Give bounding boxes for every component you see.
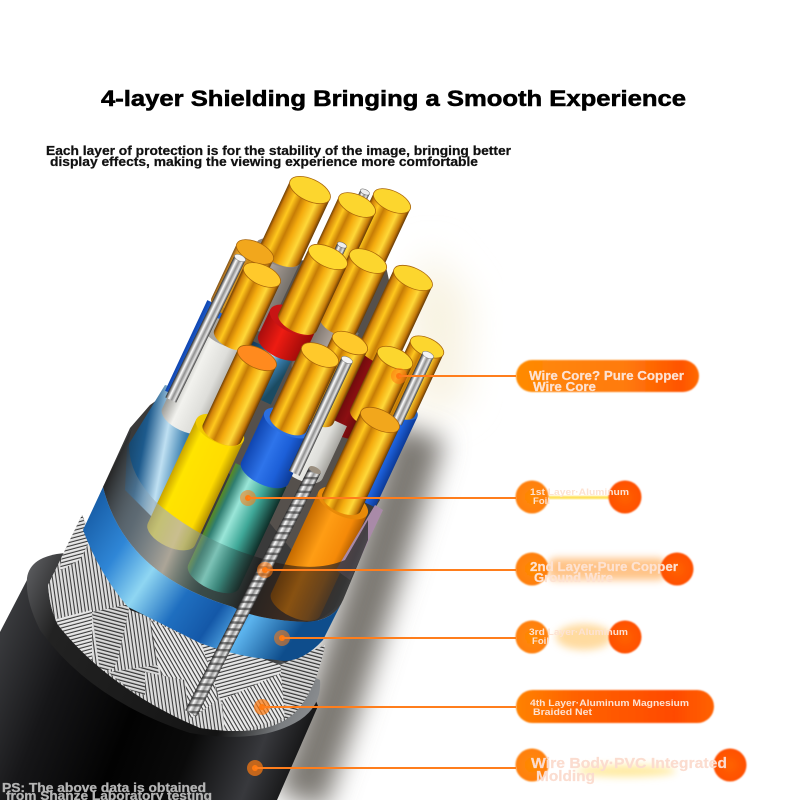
soft glow behind wires xyxy=(405,250,470,420)
insulated wire: red xyxy=(253,298,321,367)
label: wire body xyxy=(516,748,746,785)
insulated wire: white xyxy=(157,312,253,441)
subtitle text: display effects, making the viewing experience more comfortable xyxy=(50,155,478,169)
gold conductor: right middle xyxy=(295,326,371,432)
label: 1st layer: 1st Layer·Aluminum xyxy=(530,487,629,498)
insulated wire: blue right xyxy=(346,396,421,507)
label: 1st layer: Foil xyxy=(533,496,550,507)
translucent sheath layer xyxy=(103,428,368,625)
gold conductor: back middle xyxy=(314,187,379,268)
black PVC jacket xyxy=(0,553,320,800)
label: wire body: Wire Body·PVC Integrated xyxy=(531,756,727,772)
gold conductor: far right xyxy=(378,331,447,424)
label: wire body: Molding xyxy=(536,769,595,785)
label: 2nd layer: Ground Wire xyxy=(534,570,613,585)
gold conductor: front middle xyxy=(266,337,342,440)
leader: wire body xyxy=(247,760,516,776)
lavender wire edge xyxy=(336,505,383,580)
label: wire core: Wire Core xyxy=(533,379,596,394)
subtitle text xyxy=(46,144,511,169)
insulated wire: grey, back xyxy=(222,232,305,337)
gold conductor: left back xyxy=(207,234,277,324)
label: 3rd layer xyxy=(516,620,642,654)
title: 4-layer Shielding Bringing a Smooth Experience xyxy=(101,86,686,111)
label: 3rd layer: Foil xyxy=(532,636,549,647)
leader: 1st layer xyxy=(240,490,516,506)
3rd layer aluminum foil band xyxy=(83,487,343,661)
leader: 3rd layer xyxy=(274,630,516,646)
rear insulation mass xyxy=(210,260,400,560)
core base xyxy=(103,380,380,622)
gold conductor: front left xyxy=(199,340,280,451)
gold conductor: right near xyxy=(346,341,416,434)
label: 4th layer: 4th Layer·Aluminum Magnesium xyxy=(530,698,689,709)
label: 1st layer xyxy=(516,480,642,514)
gold conductor: centre xyxy=(274,239,351,340)
insulated wire: blue left xyxy=(165,300,233,403)
insulated wire: teal xyxy=(183,463,286,600)
insulated wire: white, front-centre xyxy=(278,408,347,489)
leader: 2nd layer xyxy=(257,562,516,578)
leader: wire core xyxy=(391,368,516,384)
insulated wire: yellow xyxy=(142,407,249,557)
label: 2nd layer xyxy=(516,552,694,586)
label: 4th layer xyxy=(516,690,714,723)
gold conductor: right upper xyxy=(355,260,436,370)
insulated wire: orange xyxy=(266,480,373,628)
gold conductor: left front xyxy=(210,257,284,356)
upper blue foil tube xyxy=(125,385,215,530)
leader: 4th layer xyxy=(254,699,516,715)
footnote xyxy=(2,781,212,800)
cable cast shadow xyxy=(300,432,420,800)
silver strand: centre xyxy=(289,355,354,476)
label: wire core xyxy=(516,360,699,394)
label: wire core: Wire Core? Pure Copper xyxy=(529,368,684,383)
silver strand tip: middle xyxy=(326,241,348,272)
silver strand tip: back xyxy=(351,188,371,214)
insulated wire: dark red xyxy=(316,342,399,446)
insulated wire: grey, centre xyxy=(287,313,359,394)
label: 4th layer: Braided Net xyxy=(533,707,593,718)
silver strand: far right xyxy=(391,350,435,426)
subtitle text: Each layer of protection is for the stability of the image, bringing better xyxy=(46,144,511,158)
gold conductor: front right xyxy=(318,402,403,520)
insulated wire: blue-metal below red xyxy=(231,341,292,405)
silver ground wire xyxy=(185,464,322,716)
footnote: PS: The above data is obtained xyxy=(2,781,206,795)
gold conductor: back left xyxy=(256,171,335,273)
silver strand: left xyxy=(165,253,247,403)
label: 2nd layer: 2nd Layer·Pure Copper xyxy=(530,559,678,574)
cable illustration xyxy=(0,171,447,800)
aluminum magnesium braided net xyxy=(44,510,330,735)
gold conductor: back right xyxy=(345,183,414,271)
gold conductor: centre right xyxy=(316,243,390,342)
label: 3rd layer: 3rd Layer·Aluminum xyxy=(529,627,628,638)
insulated wire: blue front xyxy=(236,401,317,495)
